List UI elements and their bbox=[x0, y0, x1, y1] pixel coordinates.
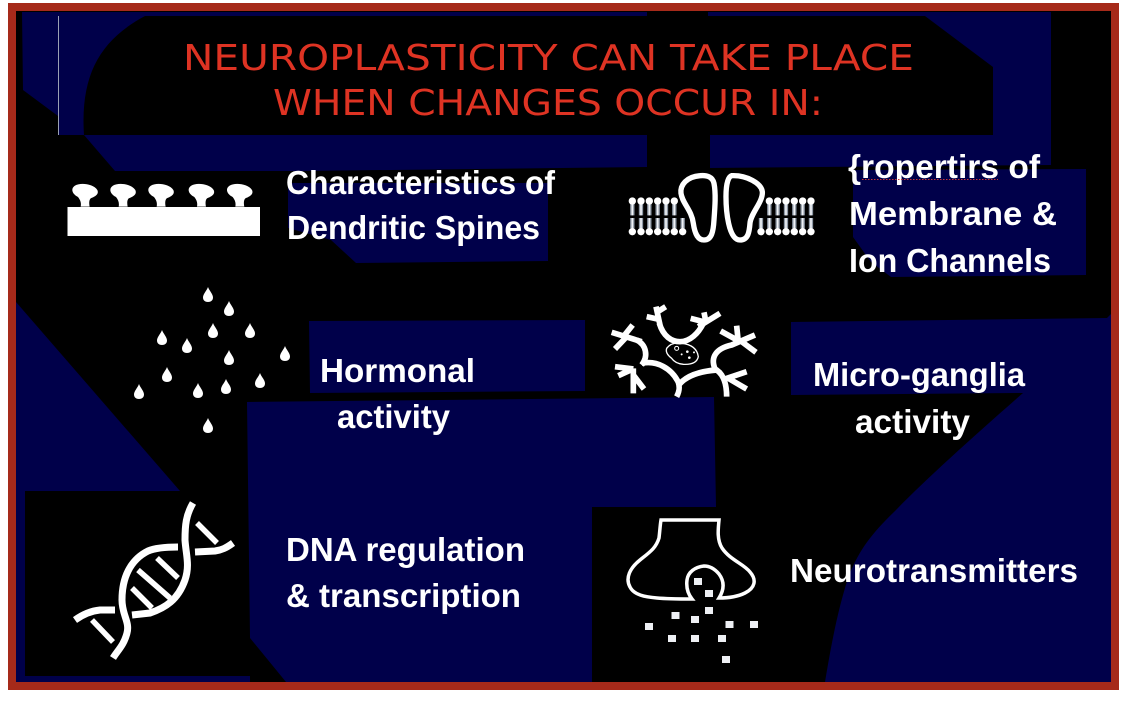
text: neurotransmitters: Neurotransmitters bbox=[790, 552, 1078, 589]
text: membrane and ion channels bbox=[848, 148, 1057, 279]
title background bbox=[84, 16, 993, 135]
icon: DNA helix bbox=[75, 503, 233, 658]
text: microglia activity: activity bbox=[855, 403, 971, 440]
icon: dendritic spines bbox=[68, 184, 260, 236]
text: DNA regulation bbox=[286, 531, 525, 614]
text: hormonal activity: Hormonal bbox=[320, 352, 475, 389]
text: microglia activity: Micro-ganglia bbox=[813, 356, 1026, 393]
text: dendritic spines bbox=[286, 164, 556, 246]
text: membrane and ion channels: {ropertirs of bbox=[848, 148, 1041, 185]
text: membrane and ion channels: Membrane & bbox=[849, 195, 1057, 232]
title: WHEN CHANGES OCCUR IN: bbox=[273, 83, 823, 124]
title bbox=[183, 38, 914, 124]
icon: hormone droplets bbox=[134, 287, 290, 433]
text: membrane and ion channels: Ion Channels bbox=[849, 242, 1051, 279]
text: DNA regulation: & transcription bbox=[286, 577, 521, 614]
icon: membrane and ion channels bbox=[629, 176, 815, 240]
text: dendritic spines: Dendritic Spines bbox=[287, 209, 540, 246]
text: microglia activity bbox=[813, 356, 1026, 440]
text: hormonal activity: activity bbox=[337, 398, 451, 435]
icon: synapse with neurotransmitters bbox=[628, 520, 758, 663]
text: hormonal activity bbox=[320, 352, 475, 435]
text: DNA regulation: DNA regulation bbox=[286, 531, 525, 568]
icon: microglia cell bbox=[612, 307, 756, 397]
text: dendritic spines: Characteristics of bbox=[286, 164, 556, 201]
title: NEUROPLASTICITY CAN TAKE PLACE bbox=[183, 38, 914, 79]
hairline bbox=[58, 16, 59, 135]
